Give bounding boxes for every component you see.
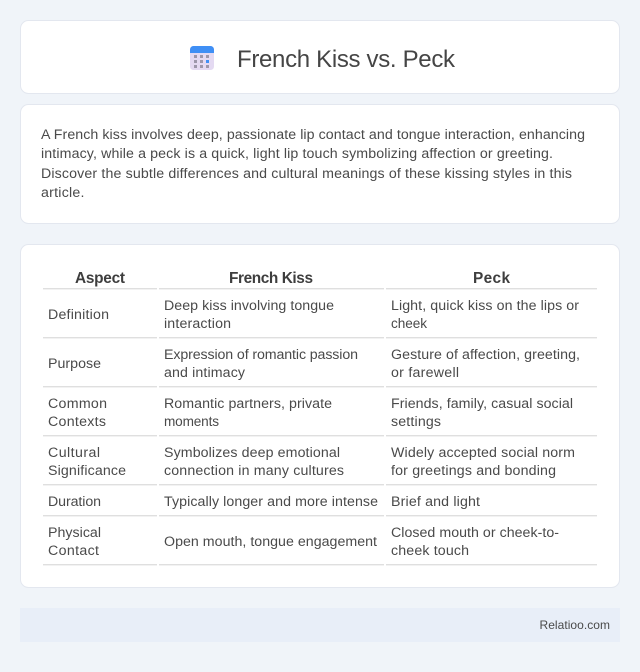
row: purpose: Gesture of affection, greeting, — [391, 347, 580, 363]
row: cultural significance — [48, 445, 575, 479]
row: definition: Deep kiss involving tongue — [164, 298, 334, 314]
row: definition: cheek — [391, 316, 427, 331]
row: cultural significance: Significance — [48, 463, 126, 479]
table header: Peck — [473, 270, 510, 287]
row: physical contact: Contact — [48, 543, 99, 559]
row: common contexts: Friends, family, casual social — [391, 396, 573, 412]
table header — [75, 270, 510, 287]
row: duration: Typically longer and more intense — [164, 494, 378, 510]
row: definition: Light, quick kiss on the lips or — [391, 298, 579, 314]
row: physical contact: Closed mouth or cheek-to- — [391, 525, 559, 541]
panel: title header — [20, 20, 620, 94]
row: purpose — [48, 347, 580, 381]
row: physical contact: Open mouth, tongue engagement — [164, 534, 377, 550]
row: physical contact: Physical — [48, 525, 101, 541]
panel: comparison table — [20, 244, 620, 588]
row: cultural significance: Cultural — [48, 445, 100, 461]
row: physical contact — [48, 525, 559, 559]
intro text — [41, 127, 585, 201]
row: common contexts: Contexts — [48, 414, 106, 430]
intro text: intimacy, while a peck is a quick, light lip touch symbolizing affection or greeting. — [41, 146, 553, 162]
panel: introduction — [20, 104, 620, 224]
row: cultural significance: Symbolizes deep emotional — [164, 445, 340, 461]
row: purpose: Purpose — [48, 356, 101, 372]
row: common contexts: Romantic partners, private — [164, 396, 332, 412]
row: common contexts: moments — [164, 414, 219, 429]
title: French Kiss vs. Peck — [237, 46, 456, 73]
row: duration: Brief and light — [391, 494, 480, 510]
row: duration — [48, 494, 480, 510]
row: cultural significance: connection in many cultures — [164, 463, 344, 479]
intro text: A French kiss involves deep, passionate lip contact and tongue interaction, enhancing — [41, 127, 585, 143]
row: common contexts: settings — [391, 414, 441, 430]
row: common contexts: Common — [48, 396, 107, 412]
footer — [20, 608, 620, 642]
row: cultural significance: for greetings and bonding — [391, 463, 556, 479]
table header: French Kiss — [229, 270, 313, 287]
row: physical contact: cheek touch — [391, 543, 469, 559]
row: purpose: or farewell — [391, 365, 459, 381]
footer credit: Relatioo.com — [540, 618, 610, 632]
row: definition — [48, 298, 579, 332]
row: common contexts — [48, 396, 573, 430]
table header: Aspect — [75, 270, 125, 287]
row: purpose: and intimacy — [164, 365, 246, 381]
intro text: Discover the subtle differences and cultural meanings of these kissing styles in this — [41, 166, 572, 182]
row: cultural significance: Widely accepted social norm — [391, 445, 575, 461]
intro text: article. — [41, 185, 84, 201]
row: definition: Definition — [48, 307, 109, 323]
row: duration: Duration — [48, 494, 101, 510]
icon: calendar — [190, 46, 214, 70]
row: purpose: Expression of romantic passion — [164, 347, 358, 363]
row: definition: interaction — [164, 316, 231, 332]
